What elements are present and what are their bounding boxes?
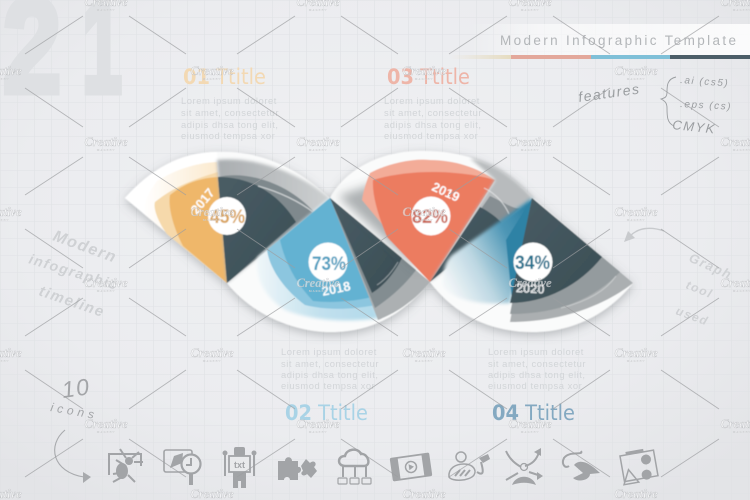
watermark labels: Creative xyxy=(296,135,340,149)
watermark labels: Creative xyxy=(84,135,128,149)
handwritten note: modern infographic timeline: timeline xyxy=(37,283,107,321)
chart white base xyxy=(125,151,633,332)
grey segment beside 2019 xyxy=(430,158,533,282)
header banner xyxy=(450,24,750,59)
handwritten note: graph tool used: used xyxy=(674,304,711,328)
label 2019: 2019 xyxy=(430,179,462,205)
watermark labels: MARKET xyxy=(309,148,327,152)
icon: cloud network xyxy=(338,450,371,484)
watermark labels: Creative xyxy=(614,346,658,360)
handwritten note: 10 icons: 10 xyxy=(60,373,92,403)
watermark labels: MARKET xyxy=(97,8,115,12)
colour stripe xyxy=(450,55,750,59)
handwritten note: graph tool used: Graph xyxy=(687,250,735,282)
icon: film strip xyxy=(391,453,431,481)
handwritten note: modern infographic timeline: infographic xyxy=(27,251,120,293)
watermark labels: MARKET xyxy=(521,430,539,434)
handwritten note: 10 icons xyxy=(49,373,99,422)
watermark labels: Creative xyxy=(508,417,552,431)
arrow: to icons xyxy=(55,430,91,483)
handwritten note: modern infographic timeline xyxy=(27,228,120,321)
icon: person with plug xyxy=(449,452,490,480)
watermark labels: MARKET xyxy=(203,218,221,222)
handwritten note: graph tool used xyxy=(674,250,735,328)
percent badge 73% xyxy=(308,242,348,282)
watermark labels: MARKET xyxy=(521,289,539,293)
block 03 text: Lorem ipsum doloret xyxy=(384,95,480,106)
icon: puzzle pieces xyxy=(278,457,317,480)
block 04 text: Lorem ipsum doloret xyxy=(488,346,584,357)
handwritten note: 10 icons: icons xyxy=(49,400,99,422)
block 03 text xyxy=(384,95,482,141)
watermark labels: MARKET xyxy=(203,359,221,363)
handwritten note: features xyxy=(577,75,732,137)
watermark labels: MARKET xyxy=(415,77,433,81)
block 02 text: eiusmod tempsa xor xyxy=(281,380,375,391)
percent badge 45%: 45% xyxy=(210,207,245,228)
icon: branching arrows xyxy=(506,448,543,485)
watermark labels: MARKET xyxy=(627,359,645,363)
segment 2017 xyxy=(125,152,227,283)
segment 2019 xyxy=(362,160,495,282)
block 02 text xyxy=(281,346,379,391)
block 01 text xyxy=(181,95,279,141)
watermark labels: MARKET xyxy=(309,430,327,434)
watermark labels: Creative xyxy=(614,205,658,219)
watermark labels: Creative xyxy=(84,276,128,290)
label 2017: 2017 xyxy=(188,185,218,217)
percent badge 34% xyxy=(514,242,552,282)
watermark labels: MARKET xyxy=(415,359,433,363)
arrow: to graph xyxy=(624,228,664,242)
icon: fish hook xyxy=(563,451,600,481)
watermark labels: Creative xyxy=(402,346,446,360)
watermark labels: MARKET xyxy=(415,218,433,222)
watermark labels: Creative xyxy=(190,64,234,78)
watermark labels: Creative xyxy=(402,64,446,78)
watermark labels: Creative xyxy=(614,64,658,78)
handwritten note: graph tool used: tool xyxy=(684,278,715,301)
label 2018: 2018 xyxy=(320,278,352,299)
watermark labels: MARKET xyxy=(97,289,115,293)
block 02 text: sit amet, consectetur xyxy=(281,358,379,369)
watermark labels: MARKET xyxy=(521,8,539,12)
handwritten note: features: features xyxy=(577,80,641,105)
DNA style wave chart xyxy=(125,151,633,335)
watermark labels: MARKET xyxy=(309,289,327,293)
block 04 text: sit amet, consectetur xyxy=(488,358,586,369)
chart shadow xyxy=(125,154,633,335)
watermark labels: MARKET xyxy=(627,218,645,222)
watermark labels: Creative xyxy=(190,205,234,219)
block 02 text: adipis dhsa tong elit, xyxy=(281,369,379,380)
block 04 text xyxy=(488,346,586,391)
segment 2018 xyxy=(257,198,379,320)
block 03 text: adipis dhsa tong elit, xyxy=(384,119,482,130)
dark inner band xyxy=(510,198,602,303)
block 04 text: eiusmod tempsa xor xyxy=(488,380,582,391)
watermark labels: Creative xyxy=(402,205,446,219)
block 01 title: 01 Ttitle xyxy=(183,65,266,89)
watermark labels: Creative xyxy=(508,135,552,149)
block 04 title: 04 Ttitle xyxy=(492,401,575,425)
block 03 text: eiusmod tempsa xor xyxy=(384,130,478,141)
watermark labels: Creative xyxy=(296,276,340,290)
percent badge 73%: 73% xyxy=(312,254,346,275)
icon: documents and badges xyxy=(618,447,659,485)
block 01 text: eiusmod tempsa xor xyxy=(181,130,275,141)
block 03 text: sit amet, consectetur xyxy=(384,107,482,118)
block 04 text: adipis dhsa tong elit, xyxy=(488,369,586,380)
grey outer band xyxy=(510,198,633,322)
watermark labels: MARKET xyxy=(97,430,115,434)
block 01 text: sit amet, consectetur xyxy=(181,107,279,118)
icon: robot xyxy=(222,447,256,488)
percent badge 82% xyxy=(412,196,450,236)
percent badge 82%: 82% xyxy=(412,207,448,228)
percent badge 45% xyxy=(208,197,246,235)
watermark labels: Creative xyxy=(296,417,340,431)
banner title: Modern Infographic Template xyxy=(500,33,736,48)
block 02 text: Lorem ipsum doloret xyxy=(281,346,377,357)
grey segment beside 2018 xyxy=(330,198,430,320)
handwritten note: features: CMYK xyxy=(672,117,717,137)
label 2020: 2020 xyxy=(515,280,545,297)
icon: magnifier and screen xyxy=(164,450,200,485)
watermark labels: Creative xyxy=(84,417,128,431)
handwritten note: features: .ai (cs5) xyxy=(680,75,730,89)
watermark labels: MARKET xyxy=(97,148,115,152)
grey segment beside 2017 xyxy=(217,159,330,283)
watermark labels: MARKET xyxy=(203,77,221,81)
shadow under segment 2019 xyxy=(338,180,420,272)
block 01 text: Lorem ipsum doloret xyxy=(181,95,277,106)
icon: spider on screen xyxy=(109,449,143,482)
watermark labels: MARKET xyxy=(627,77,645,81)
icon: robot: txt xyxy=(234,460,245,470)
large faded number 21 xyxy=(3,0,122,121)
handwritten note: features: .eps (cs) xyxy=(680,99,732,113)
handwritten note: modern infographic timeline: Modern xyxy=(51,228,119,267)
watermark labels: Creative xyxy=(190,346,234,360)
brace xyxy=(661,77,676,126)
block 01 text: adipis dhsa tong elit, xyxy=(181,119,279,130)
percent badge 34%: 34% xyxy=(515,253,550,274)
watermark labels: MARKET xyxy=(309,8,327,12)
segment 2020 xyxy=(443,198,633,322)
watermark labels: Creative xyxy=(508,276,552,290)
block 02 title: 02 Ttitle xyxy=(285,401,368,425)
block 03 title: 03 Ttitle xyxy=(387,65,470,89)
watermark labels: MARKET xyxy=(521,148,539,152)
